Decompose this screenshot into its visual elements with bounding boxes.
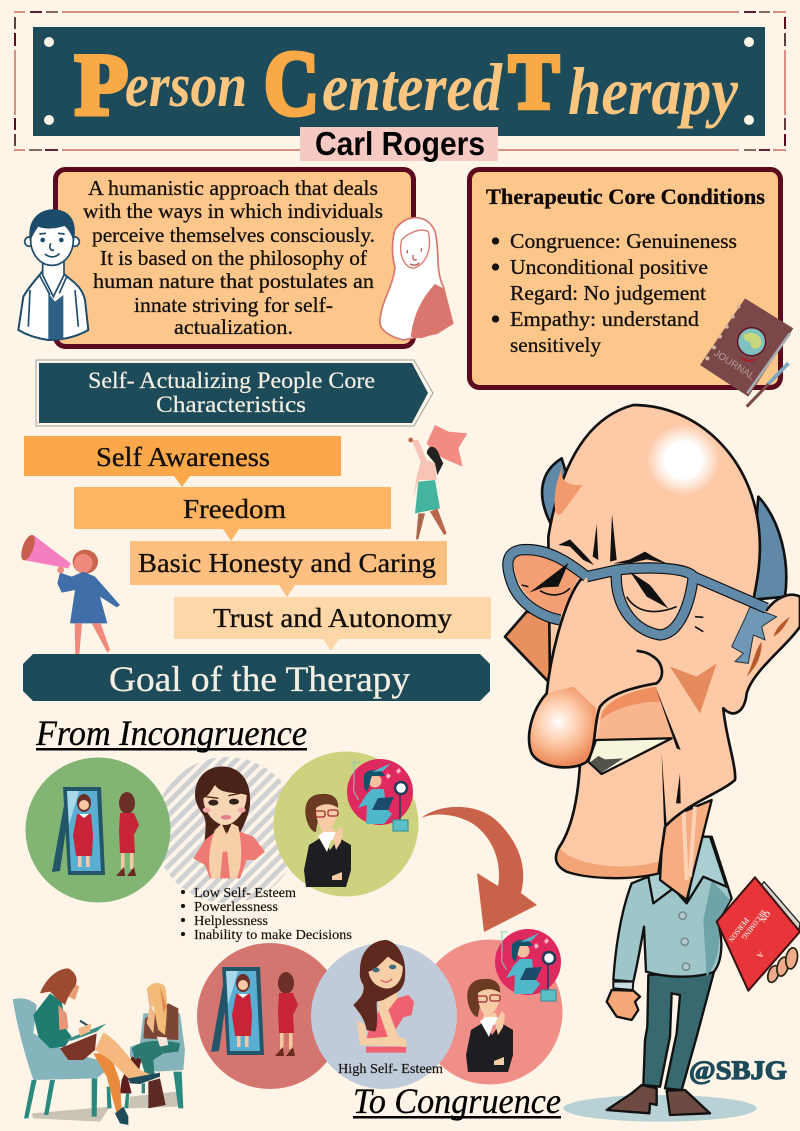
step: trust and autonomy: Trust and Autonomy	[213, 603, 453, 633]
neck	[660, 800, 712, 900]
list: incongruence symptoms: Helplessness	[194, 913, 268, 928]
list: incongruence symptoms: Inability to make Decisions	[194, 927, 352, 942]
icon: journal	[700, 298, 793, 407]
title text: herapy	[568, 53, 739, 129]
caricature: Carl Rogers body: BECOMING	[739, 908, 768, 941]
caricature: Carl Rogers body	[563, 837, 800, 1122]
chin shading	[557, 848, 658, 877]
step: self awareness	[24, 436, 341, 487]
banner: goal of the therapy	[23, 654, 490, 701]
conditions list	[492, 229, 737, 357]
icon: woman with flag	[408, 425, 467, 539]
caption: high self-esteem: High Self- Esteem	[338, 1061, 444, 1076]
list: incongruence symptoms: Low Self- Esteem	[194, 885, 297, 900]
bald highlight	[647, 424, 720, 496]
definition text: human nature that postulates an	[93, 269, 375, 293]
trousers	[643, 972, 714, 1090]
step: freedom: Freedom	[183, 494, 286, 524]
definition text: with the ways in which individuals	[83, 199, 383, 223]
title text: C	[264, 32, 319, 134]
brows	[558, 539, 667, 565]
circle: high self-esteem woman	[311, 940, 457, 1089]
teeth	[588, 738, 672, 774]
signature: @SBJG	[689, 1056, 787, 1085]
definition text: perceive themselves consciously.	[92, 223, 375, 247]
eyes	[529, 563, 668, 608]
cuff	[613, 982, 633, 990]
step: basic honesty and caring	[130, 541, 447, 597]
caricature: Carl Rogers body: A	[755, 950, 766, 960]
circle: businesswoman with worry thought	[274, 752, 418, 896]
floor shadow	[563, 1095, 757, 1122]
face and skull	[548, 405, 800, 878]
title text: entered	[322, 49, 503, 125]
buttons	[679, 912, 690, 970]
icon: journal: JOURNAL	[711, 348, 757, 383]
arrow: incongruence to congruence	[421, 807, 537, 932]
collar	[648, 837, 727, 903]
icon: woman with megaphone	[18, 533, 120, 654]
fist	[607, 990, 640, 1020]
definition text: It is based on the philosophy of	[100, 246, 367, 270]
icon: man	[18, 209, 88, 340]
definition text	[83, 176, 383, 339]
list: incongruence symptoms: Powerlessness	[194, 899, 278, 914]
therapist chair	[13, 998, 112, 1118]
conditions list: Regard: No judgement	[510, 281, 706, 305]
client	[120, 983, 180, 1108]
conditions list: sensitively	[510, 333, 602, 357]
caricature: Carl Rogers head	[505, 405, 800, 900]
upper lip	[597, 687, 673, 740]
client chair	[124, 1013, 185, 1108]
list: incongruence symptoms	[181, 885, 352, 942]
panel: therapeutic core conditions	[470, 170, 780, 388]
far cheek	[505, 612, 565, 682]
ear detail	[747, 617, 790, 677]
banner: self-actualizing core characteristics: Self- Actualizing People Core	[88, 368, 375, 393]
definition text: A humanistic approach that deals	[88, 176, 378, 200]
icon: woman	[380, 218, 453, 340]
shirt	[613, 837, 732, 982]
heading: to congruence: To Congruence	[353, 1081, 561, 1121]
conditions list: Unconditional positive	[510, 255, 708, 279]
definition text: innate striving for self-	[134, 293, 333, 317]
title text: erson	[125, 52, 247, 120]
circle: salmon businesswoman	[418, 929, 562, 1084]
face lines	[656, 688, 681, 825]
glasses	[508, 550, 767, 635]
panel heading: Therapeutic Core Conditions	[486, 184, 765, 209]
left lens tint	[514, 552, 580, 617]
conditions list: Congruence: Genuineness	[510, 229, 737, 253]
title text	[75, 32, 739, 134]
circle: mirror, congruent self-image	[197, 943, 343, 1089]
shoes	[607, 1085, 710, 1115]
title banner	[33, 27, 765, 136]
banner: self-actualizing core characteristics	[36, 360, 433, 426]
skull shading	[555, 460, 583, 515]
decorative frame	[14, 12, 786, 150]
definition text: actualization.	[174, 315, 293, 339]
step: freedom	[74, 487, 391, 541]
conditions list: Empathy: understand	[510, 307, 700, 331]
panel: definition	[56, 170, 414, 346]
title text: T	[509, 38, 559, 125]
circle: mirror, low self-image	[26, 758, 170, 902]
step: self awareness: Self Awareness	[96, 442, 270, 472]
step: trust and autonomy	[174, 597, 491, 651]
fingers	[766, 947, 799, 984]
step: basic honesty and caring: Basic Honesty and Caring	[138, 548, 436, 578]
banner: goal of the therapy: Goal of the Therapy	[109, 659, 410, 699]
banner: self-actualizing core characteristics: Characteristics	[156, 392, 306, 417]
forehead wrinkles	[593, 514, 617, 562]
heading: from incongruence: From Incongruence	[35, 713, 307, 753]
cheek shadow	[670, 663, 717, 713]
back hair	[542, 458, 786, 600]
subtitle: Carl Rogers: Carl Rogers	[315, 125, 485, 162]
caricature: Carl Rogers body: ON	[758, 909, 773, 924]
title text: P	[75, 37, 128, 134]
circle: low self-esteem woman	[154, 757, 300, 903]
caricature: Carl Rogers body: PERSON	[726, 916, 751, 944]
side hair	[732, 607, 777, 663]
nose	[529, 578, 662, 767]
therapist	[33, 968, 160, 1125]
red book	[762, 882, 800, 933]
illustration: therapy session	[13, 968, 185, 1125]
